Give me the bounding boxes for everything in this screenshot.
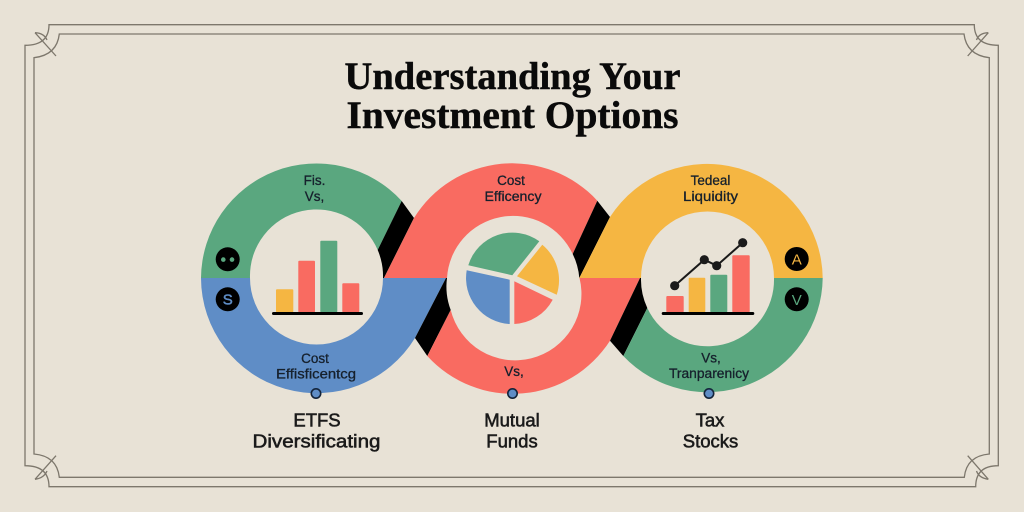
right ring top label: Tedeal xyxy=(691,173,730,188)
column label: ETFS: Diversificating xyxy=(252,431,380,452)
middle ring top label: Cost xyxy=(497,173,525,188)
right ring top segment xyxy=(579,164,823,278)
middle ring top segment xyxy=(384,163,597,278)
icon: dots badge xyxy=(216,247,240,271)
column label: Tax Stocks: Tax xyxy=(696,410,725,431)
bar chart: left ring xyxy=(272,241,363,315)
lower right connector band xyxy=(610,278,647,356)
combo chart: right ring xyxy=(662,238,754,315)
column label: Mutual Funds: Funds xyxy=(486,431,538,452)
right ring bottom label: Vs, xyxy=(701,351,721,366)
left ring top segment xyxy=(201,163,402,278)
middle ring top label: Efficency xyxy=(484,189,542,204)
icon: V badge: V xyxy=(792,292,802,309)
right ring top label xyxy=(683,173,738,204)
middle ring top label xyxy=(484,173,542,204)
upper right connector band xyxy=(573,201,610,278)
icon: A badge: A xyxy=(792,252,802,268)
left ring bottom label xyxy=(276,351,356,382)
title: Investment Options xyxy=(346,93,678,137)
lower left connector band xyxy=(415,278,451,356)
title xyxy=(344,54,680,137)
left ring bottom label: Cost xyxy=(301,351,329,366)
left ring top label: Vs, xyxy=(305,189,324,204)
right ring top label: Liquidity xyxy=(683,189,738,204)
left ring top label xyxy=(304,173,325,204)
column label: Mutual Funds: Mutual xyxy=(484,410,540,431)
right ring bottom segment xyxy=(623,278,823,392)
icon: S badge: S xyxy=(223,292,233,309)
title: Understanding Your xyxy=(344,54,680,98)
marker dot: left xyxy=(311,389,321,398)
marker dot: right xyxy=(704,389,714,398)
panel: linked rings xyxy=(201,163,823,394)
pie chart: middle ring xyxy=(466,233,559,324)
right ring bottom label xyxy=(669,351,749,381)
column label: ETFS: ETFS xyxy=(293,410,341,431)
left ring bottom segment xyxy=(201,278,446,393)
icon: A badge xyxy=(785,247,809,271)
left connector band xyxy=(378,201,414,278)
middle ring bottom label: Vs, xyxy=(504,364,524,379)
marker dot: middle xyxy=(508,389,517,398)
left ring bottom label: Effisficentcg xyxy=(276,367,356,382)
icon: S badge xyxy=(216,287,240,311)
middle ring bottom segment xyxy=(427,278,640,394)
column label: Mutual Funds xyxy=(484,410,540,452)
right ring bottom label: Tranparenicy xyxy=(669,366,749,381)
column label: Tax Stocks: Stocks xyxy=(683,431,738,452)
column label: Tax Stocks xyxy=(683,410,738,452)
icon: V badge xyxy=(785,287,809,311)
column label: ETFS xyxy=(252,410,380,452)
left ring top label: Fis. xyxy=(304,173,325,188)
